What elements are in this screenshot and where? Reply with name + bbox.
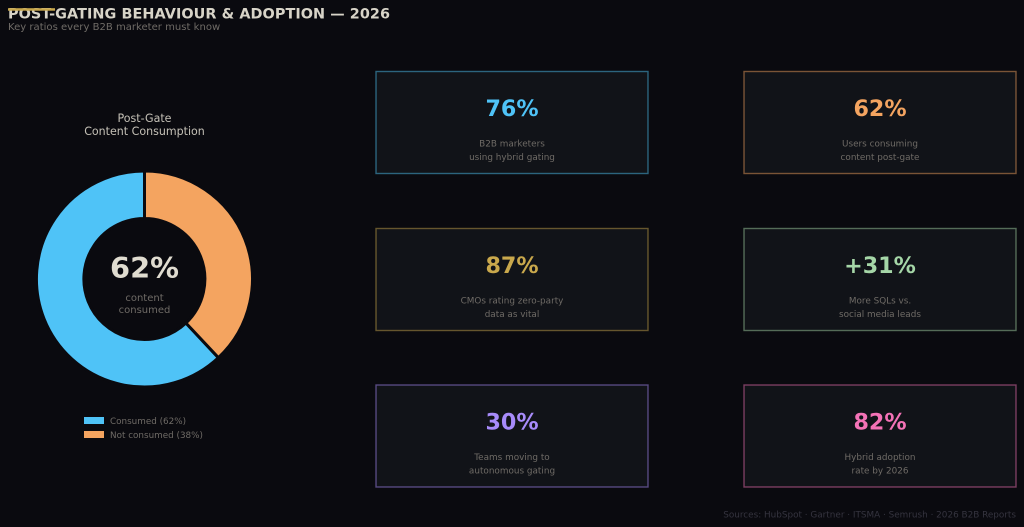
value: 62% [853,96,907,122]
subtitle: Key ratios every B2B marketer must know [8,22,220,33]
header [8,6,390,33]
donut slice: consumed 62% [36,171,218,387]
label: data as vital [485,310,539,320]
label: content post-gate [841,153,919,163]
chart title: Post-Gate [118,112,172,125]
panel: 82% card [744,385,1016,487]
donut centre label: consumed [119,305,170,316]
legend: Not consumed (38%) [110,431,203,441]
panel: +31% card [744,228,1016,330]
label: More SQLs vs. [849,297,911,307]
panel: 30% card [376,385,648,487]
title accent line [8,8,55,11]
donut centre label: content [125,293,164,304]
value: 82% [853,409,907,435]
sources footer: Sources: HubSpot · Gartner · ITSMA · Semrush · 2026 B2B Reports [723,510,1016,520]
chart title: Content Consumption [84,125,205,138]
label: rate by 2026 [852,467,909,477]
panel: 87% card [376,228,648,330]
label: Teams moving to [473,453,550,463]
title: POST-GATING BEHAVIOUR & ADOPTION — 2026 [8,6,390,22]
label: Hybrid adoption [844,453,916,463]
value: +31% [844,253,916,279]
value: 76% [485,96,539,122]
panel: donut chart [36,112,252,441]
value: 87% [485,253,539,279]
label: CMOs rating zero-party [461,297,563,307]
donut slice: not consumed 38% [144,171,252,358]
legend [84,417,203,441]
panel: 76% card [376,72,648,174]
label: B2B marketers [479,140,545,150]
donut centre value: 62% [110,251,179,285]
label: Users consuming [842,140,918,150]
label: using hybrid gating [469,153,555,163]
value: 30% [485,409,539,435]
label: autonomous gating [469,467,555,477]
legend: Consumed (62%) [110,417,186,427]
panel: 62% card [744,72,1016,174]
label: social media leads [839,310,921,320]
